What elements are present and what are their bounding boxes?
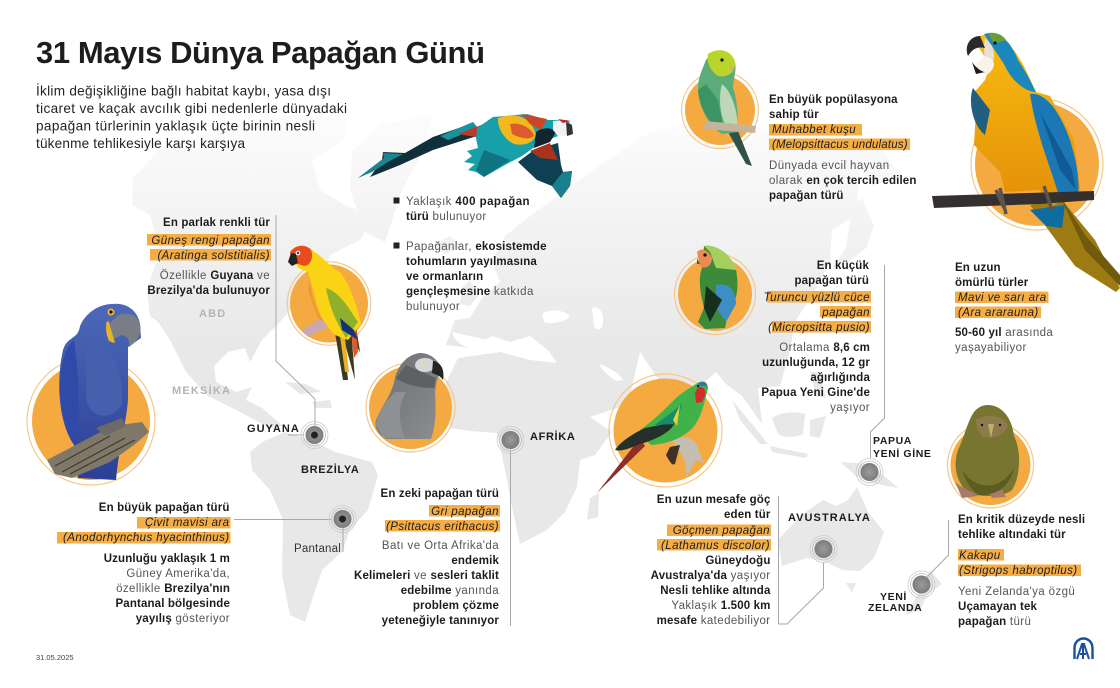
bullet text: species count: Yaklaşık 400 papağan [406, 196, 530, 208]
place labels: ZELANDA [868, 602, 922, 614]
leader line [926, 520, 948, 578]
panel: swift parrot: eden tür [724, 509, 771, 521]
bullet marker [394, 242, 400, 248]
map pin: Africa [497, 426, 524, 454]
description: Ortalama 8,6 cm [779, 342, 870, 354]
place labels [172, 308, 932, 614]
panel: blue and yellow macaw [932, 33, 1120, 354]
heading: En uzun mesafe göç [657, 494, 771, 506]
description: Batı ve Orta Afrika'da [382, 540, 499, 552]
panel: grey parrot: edebilme yanında [401, 585, 499, 597]
panel: pygmy parrot [674, 246, 884, 458]
species highlight: Göçmen papağan [673, 525, 770, 537]
panel: bullet facts: gençleşmesine katkıda [406, 286, 534, 298]
inland seas are drawn white [452, 307, 623, 381]
circle [369, 366, 452, 449]
bird: kakapo [955, 405, 1019, 498]
heading: En büyük popülasyona [769, 94, 898, 106]
bird: blue and yellow macaw [932, 33, 1120, 292]
panel: budgerigar: olarak en çok tercih edilen [769, 175, 916, 187]
circle [975, 102, 1099, 226]
panel: bullet facts: bulunuyor [406, 301, 460, 313]
species highlight: Muhabbet kuşu [772, 124, 856, 136]
panel: hyacinth macaw: Güney Amerika'da, [126, 568, 230, 580]
description: Özellikle Guyana ve [160, 270, 270, 282]
panel: pygmy parrot: yaşıyor [830, 402, 870, 414]
intro text: ticaret ve kaçak avcılık gibi nedenlerle dünyadaki [36, 101, 347, 116]
panel: blue and yellow macaw: ömürlü türler [955, 277, 1029, 289]
heading: En zeki papağan türü [381, 488, 499, 500]
species highlight: Gri papağan [431, 506, 499, 518]
species highlight [958, 549, 1081, 577]
species highlight: (Ara ararauna) [958, 307, 1039, 319]
bird: hyacinth macaw [47, 304, 149, 480]
description: Uzunluğu yaklaşık 1 m [104, 553, 230, 565]
place labels: PAPUA [873, 435, 912, 447]
species highlight: (Strigops habroptilus) [959, 565, 1078, 577]
circle [614, 378, 718, 482]
species highlight [769, 124, 910, 151]
description: Yeni Zelanda'ya özgü [958, 586, 1075, 598]
species highlight [385, 505, 500, 533]
bird: budgerigar [698, 50, 756, 166]
leader line [276, 215, 315, 426]
panel: hyacinth macaw: Pantanal bölgesinde [116, 598, 230, 610]
panel: hyacinth macaw [27, 304, 331, 625]
panel: bullet facts: ve ormanların [406, 271, 483, 283]
panel: grey parrot [354, 353, 510, 627]
panel: pygmy parrot: uzunluğunda, 12 gr [762, 357, 870, 369]
intro text: papağan türlerinin yaklaşık üçte birinin nesli [36, 118, 315, 134]
heading: En kritik düzeyde nesli [958, 514, 1085, 526]
date: 31.05.2025 [36, 653, 74, 662]
heading: En parlak renkli tür [163, 217, 270, 229]
panel: budgerigar [682, 50, 916, 202]
species highlight: (Aratinga solstitialis) [157, 250, 270, 262]
logo: AA [1074, 638, 1092, 659]
species highlight [57, 517, 230, 544]
bird: flying macaw [358, 114, 573, 198]
place labels: ABD [199, 308, 226, 320]
intro text: tükenme tehlikesiyle karşı karşıya [36, 136, 245, 151]
bird: african grey [375, 353, 444, 439]
panel: grey parrot: Kelimeleri ve sesleri taklit [354, 570, 499, 582]
panel: kakapo [926, 405, 1085, 628]
place labels: MEKSİKA [172, 384, 231, 397]
circle [32, 362, 150, 480]
heading: En büyük papağan türü [99, 502, 230, 514]
bird: swift parrot [597, 381, 708, 493]
bird: sun parakeet [288, 246, 361, 380]
species highlight [764, 291, 871, 334]
description: 50-60 yıl arasında [955, 327, 1053, 339]
species highlight: (Psittacus erithacus) [386, 521, 499, 533]
map pin: Papua New Guinea [856, 458, 883, 486]
panel: hyacinth macaw: özellikle Brezilya'nın [116, 583, 230, 595]
intro text [36, 84, 347, 151]
panel: grey parrot: yeteneğiyle tanınıyor [382, 615, 499, 627]
heading: En küçük [817, 260, 869, 272]
species highlight: (Lathamus discolor) [661, 540, 770, 552]
map pin: Australia [810, 536, 837, 562]
place labels: AVUSTRALYA [788, 512, 871, 524]
place labels: GUYANA [247, 423, 300, 435]
species highlight: (Anodorhynchus hyacinthinus) [63, 532, 230, 544]
species highlight: papağan [821, 307, 870, 319]
panel: swift parrot: mesafe katedebiliyor [657, 615, 770, 627]
circle [678, 257, 752, 331]
species highlight: Turuncu yüzlü cüce [764, 292, 870, 304]
place labels: AFRİKA [530, 430, 576, 443]
title: 31 Mayıs Dünya Papağan Günü [36, 35, 485, 70]
panel: budgerigar: papağan türü [769, 190, 844, 202]
panel: pygmy parrot: Papua Yeni Gine'de [761, 387, 870, 399]
map pin: Guyana [288, 422, 328, 448]
leader line [234, 518, 331, 520]
panel: kakapo: Uçamayan tek [958, 601, 1037, 613]
panel: pygmy parrot: ağırlığında [810, 372, 870, 384]
species highlight: Çivit mavisi ara [145, 517, 230, 529]
panel: swift parrot: Avustralya'da yaşıyor [651, 570, 770, 582]
panel: kakapo: papağan türü [958, 616, 1031, 628]
place labels: BREZİLYA [301, 463, 360, 476]
place labels: Pantanal [294, 543, 341, 555]
place labels: YENİ GİNE [873, 447, 932, 460]
species highlight: (Melopsittacus undulatus) [772, 139, 908, 151]
panel: bullet facts: tohumların yayılmasına [406, 256, 537, 268]
panel: pygmy parrot: papağan türü [794, 275, 869, 287]
intro text: İklim değişikliğine bağlı habitat kaybı, yasa dışı [36, 84, 331, 98]
species highlight: Kakapu [959, 550, 1001, 562]
panel: sun parakeet [147, 215, 371, 426]
panel: grey parrot: problem çözme [413, 600, 499, 612]
description: Güneydoğu [705, 555, 770, 567]
circle [290, 264, 368, 342]
panel: sun parakeet: Brezilya'da bulunuyor [147, 285, 270, 297]
species highlight: Güneş rengi papağan [151, 235, 270, 247]
panel: swift parrot: Nesli tehlike altında [660, 585, 771, 597]
panel: budgerigar: sahip tür [769, 109, 819, 121]
map pin: Pantanal [329, 506, 356, 552]
bullet text: ecosystem role: Papağanlar, ekosistemde [406, 241, 547, 253]
world map background [132, 115, 942, 622]
panel: hyacinth macaw: yayılış gösteriyor [136, 613, 230, 625]
panel: swift parrot: Yaklaşık 1.500 km [671, 600, 770, 612]
circle [685, 75, 755, 145]
species highlight: Mavi ve sarı ara [958, 292, 1047, 304]
heading: En uzun [955, 262, 1001, 274]
panel: blue and yellow macaw: yaşayabiliyor [955, 342, 1027, 354]
species highlight: (Micropsitta pusio) [768, 322, 870, 334]
place labels: YENİ [880, 590, 907, 603]
species highlight [657, 524, 771, 552]
leader line [510, 450, 512, 626]
panel: grey parrot: endemik [451, 555, 499, 567]
panel: kakapo: tehlike altındaki tür [958, 529, 1066, 541]
circle [950, 425, 1030, 505]
leader line [870, 265, 884, 458]
bird: pygmy parrot [697, 246, 737, 329]
map pin: New Zealand [908, 571, 935, 598]
species highlight [955, 292, 1048, 319]
panel: bullet facts: türü bulunuyor [406, 211, 487, 223]
description: Dünyada evcil hayvan [769, 160, 890, 172]
bullet marker [394, 198, 400, 204]
leader line [778, 496, 824, 624]
panel: bullet facts [394, 196, 547, 313]
species highlight [147, 234, 271, 262]
panel: swift parrot [597, 374, 824, 627]
